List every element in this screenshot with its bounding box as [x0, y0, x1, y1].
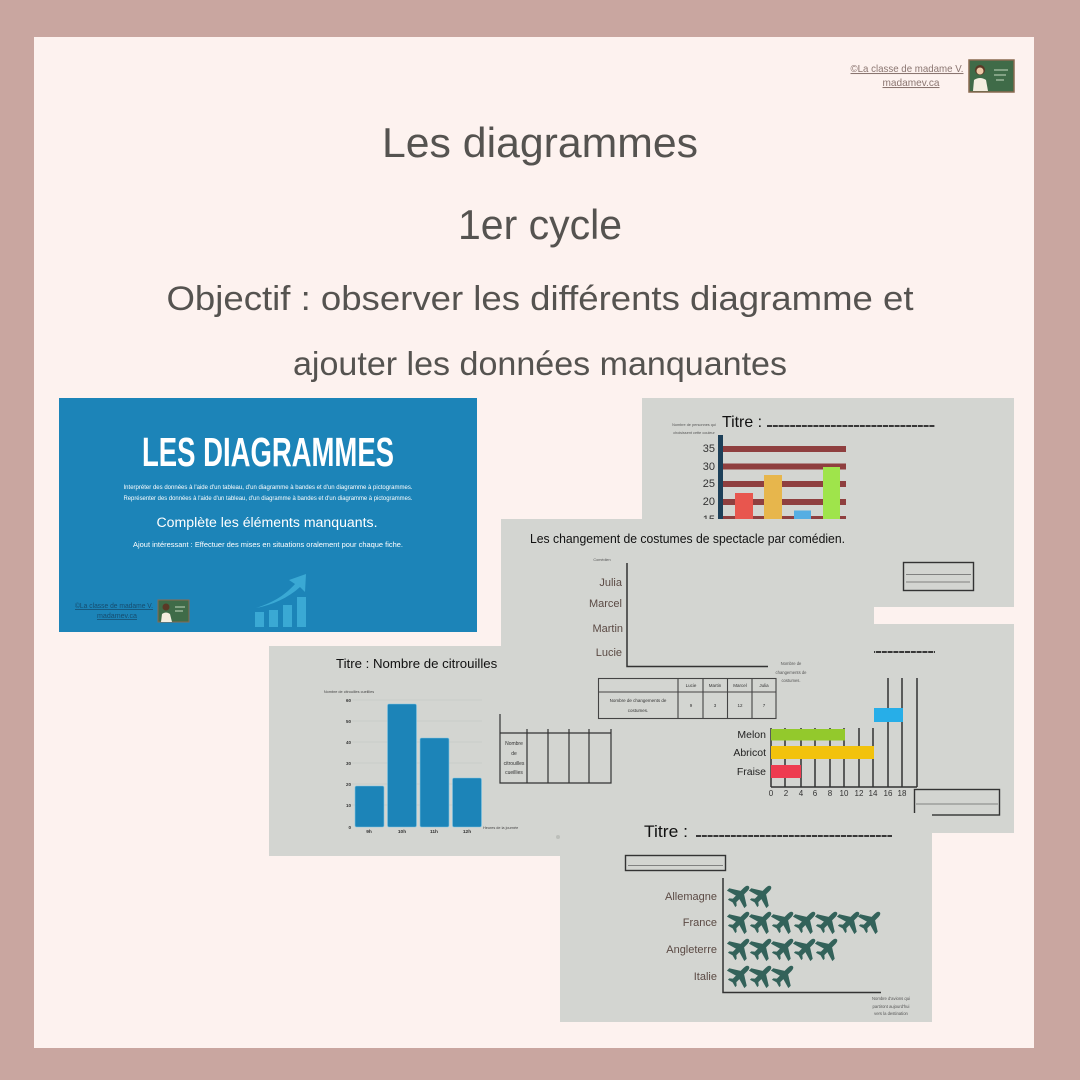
x axis labels: 18: [898, 789, 907, 798]
x axis caption: [776, 661, 807, 683]
x axis labels: 6: [813, 789, 818, 798]
table row heading: citrouilles: [504, 761, 525, 767]
x axis caption: vers la destination: [874, 1011, 909, 1016]
objective line 2: ajouter les données manquantes: [293, 345, 787, 382]
y axis labels: 30: [346, 761, 351, 766]
cover heading: LES DIAGRAMMES: [142, 429, 394, 475]
legend box: [626, 856, 726, 870]
y axis labels: 35: [703, 443, 715, 455]
data table: 7: [763, 703, 766, 708]
Fraise bar: [771, 765, 801, 778]
country labels: Angleterre: [666, 944, 717, 956]
table row heading: de: [511, 751, 517, 757]
x axis labels: 10: [840, 789, 849, 798]
chart title: Les changement de costumes de spectacle par comédien.: [530, 532, 845, 546]
y axis labels: 20: [703, 496, 715, 508]
title blank line: [696, 835, 892, 837]
names: Lucie: [596, 647, 622, 659]
copyright mark: [556, 835, 560, 839]
names: Martin: [592, 623, 623, 635]
axes: [627, 563, 768, 666]
y axis caption: choisissent cette couleur: [673, 431, 716, 435]
x axis labels: 14: [869, 789, 878, 798]
country labels: France: [683, 917, 717, 929]
amber bar: [764, 475, 782, 525]
table row heading: Nombre: [505, 741, 523, 747]
x axis labels: 0: [769, 789, 774, 798]
panel: blue cover slide: [59, 398, 477, 632]
Melon bar: [771, 729, 845, 740]
x axis caption: changements de: [776, 670, 807, 675]
data table: 9: [690, 703, 693, 708]
grid bars: [723, 446, 846, 522]
panel: pumpkin bar chart slide: [269, 646, 642, 856]
x axis labels: 12h: [463, 829, 471, 835]
chart title: Titre :: [644, 822, 688, 841]
y axis caption: Nombre de personnes qui: [672, 423, 716, 427]
y axis labels: [703, 443, 715, 526]
y axis labels: [346, 698, 351, 830]
title blank line: [767, 425, 935, 427]
x axis caption: costumes.: [781, 678, 801, 683]
y axis caption: Nombre de citrouilles cueillies: [324, 690, 374, 694]
x axis labels: 12: [855, 789, 864, 798]
panel: top right bar chart slide: [642, 398, 1014, 607]
grid lines: [352, 700, 482, 805]
cover credit: [75, 601, 153, 620]
data table: [598, 678, 776, 718]
credit top right: ©La classe de madame V.: [850, 63, 964, 75]
x axis labels: 2: [784, 789, 789, 798]
panel: airplanes pictogram slide: [560, 813, 932, 1022]
pictogram row: Angleterre: [723, 931, 845, 965]
chart title: Titre :: [722, 414, 762, 431]
icon: growth chart with arrow: [255, 574, 306, 627]
table: [500, 714, 611, 783]
data table: Julia: [759, 683, 769, 688]
legend box: [914, 790, 1000, 815]
x axis labels: 16: [884, 789, 893, 798]
y axis labels: 60: [346, 698, 351, 703]
country labels: [665, 891, 717, 983]
x axis caption: Nombre d'avions qui: [872, 996, 910, 1001]
cover note: Ajout intéressant : Effectuer des mises en situations oralement pour chaque fiche.: [133, 540, 403, 549]
cover instruction: Complète les éléments manquants.: [156, 515, 378, 530]
panel: costumes slide: [501, 519, 1014, 728]
cover teacher icon: [158, 600, 189, 622]
x axis labels: [366, 829, 471, 835]
y axis caption: [672, 423, 716, 435]
data table: Nombre de changements de: [610, 698, 667, 703]
x axis caption: [872, 996, 910, 1016]
x axis labels: [769, 789, 907, 798]
x axis labels: 8: [828, 789, 833, 798]
x axis caption: partiront aujourd'hui: [873, 1004, 910, 1009]
names: Julia: [599, 577, 623, 589]
pictogram row: Italie: [723, 958, 801, 992]
x axis labels: 11h: [430, 829, 438, 835]
data table: costumes.: [628, 708, 648, 713]
cover credit: madamev.ca: [97, 611, 138, 620]
y axis labels: 25: [703, 478, 715, 490]
names: [589, 577, 623, 659]
category labels: [733, 729, 766, 778]
y axis labels: 0: [348, 825, 351, 830]
bars: [355, 704, 482, 827]
title blank line: [760, 651, 935, 653]
y axis labels: 20: [346, 782, 351, 787]
blue bar: [794, 510, 811, 526]
data table: Lucie: [686, 683, 697, 688]
objective line 1: Objectif : observer les différents diagramme et: [166, 280, 914, 318]
y axis labels: 15: [703, 514, 715, 526]
y axis labels: 40: [346, 740, 351, 745]
red bar: [735, 493, 753, 525]
credit top right: madamev.ca: [882, 77, 940, 89]
y axis labels: 10: [346, 803, 351, 808]
x axis labels: 4: [799, 789, 804, 798]
data table: 12: [737, 703, 743, 708]
category labels: Melon: [737, 729, 766, 741]
cover text line 2: Représenter des données à l'aide d'un tableau, d'un diagramme à bandes et d'un diagramme à pictogrammes.: [124, 496, 413, 502]
y axis: [718, 435, 723, 525]
y axis labels: 30: [703, 461, 715, 473]
legend box: [904, 562, 974, 590]
data table: 3: [714, 703, 717, 708]
title: Les diagrammes: Les diagrammes: [382, 119, 698, 166]
vertical grid lines: [771, 678, 917, 787]
axes: [723, 878, 881, 992]
panel: melon bar chart slide: [642, 624, 1014, 833]
y axis labels: 50: [346, 719, 351, 724]
category labels: Fraise: [737, 766, 766, 778]
x axis caption: Nombre de: [781, 661, 802, 666]
country labels: Allemagne: [665, 891, 717, 903]
credit top right: [850, 60, 1014, 92]
x axis labels: 10h: [398, 829, 406, 835]
Abricot bar: [771, 746, 874, 759]
data table: Martin: [709, 683, 722, 688]
x axis caption: Heures de la journée: [483, 826, 518, 830]
pictogram row: Allemagne: [723, 878, 779, 912]
blue bar: [874, 708, 903, 722]
table row heading: cueillies: [505, 770, 523, 776]
table row heading: [504, 741, 525, 776]
cover text line 1: Interpréter des données à l'aide d'un tableau, d'un diagramme à bandes et d'un diagramme à pictogrammes.: [124, 485, 413, 491]
names: Marcel: [589, 598, 622, 610]
pictogram row: France: [723, 904, 888, 938]
pale edge: [640, 624, 642, 813]
title: 1er cycle: 1er cycle: [458, 201, 622, 248]
cover credit: ©La classe de madame V.: [75, 601, 153, 610]
chart title: Titre : Nombre de citrouilles cueillies: [336, 656, 549, 671]
green bar: [823, 467, 840, 525]
category labels: Abricot: [733, 747, 766, 759]
data table: Marcel: [733, 683, 747, 688]
country labels: Italie: [694, 971, 717, 983]
y axis caption: Comédien: [593, 558, 611, 562]
x axis labels: 9h: [366, 829, 372, 835]
